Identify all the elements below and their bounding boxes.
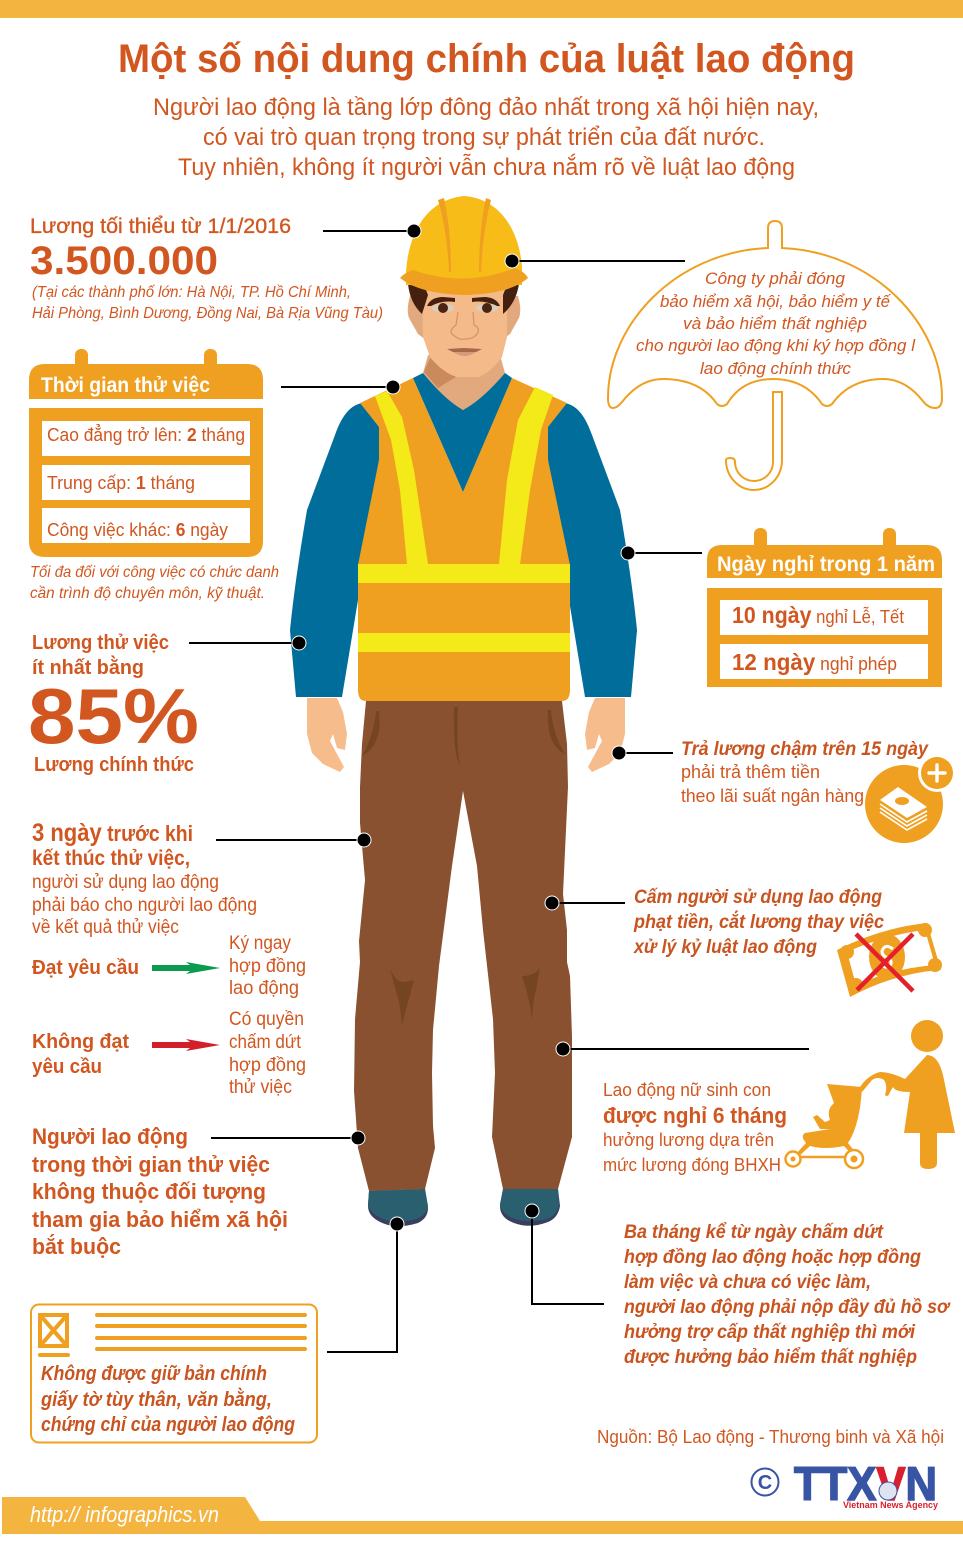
intro text xyxy=(153,94,819,181)
document lines xyxy=(95,1313,307,1351)
outcome: pass: Đạt yêu cầu xyxy=(32,957,139,979)
probation salary: Lương chính thức xyxy=(34,754,194,776)
notice before end of probation: người sử dụng lao động xyxy=(32,872,219,893)
icon: ID photo xyxy=(38,1315,70,1357)
neck shadow xyxy=(424,358,456,388)
outcome: pass: Ký ngay xyxy=(229,933,291,954)
document panel: chứng chỉ của người lao động xyxy=(41,1414,295,1436)
social insurance note: tham gia bảo hiểm xã hội xyxy=(32,1207,288,1232)
icon: crossed-out banknote xyxy=(837,923,942,997)
reflective stripes xyxy=(358,387,570,652)
calendar header xyxy=(707,545,942,578)
probation note: cần trình độ chuyên môn, kỹ thuật. xyxy=(30,585,265,602)
calendar body xyxy=(707,588,942,687)
late payment note: phải trả thêm tiền xyxy=(681,762,820,782)
right shoe xyxy=(500,1189,560,1226)
social insurance note: bắt buộc xyxy=(32,1234,121,1259)
late payment note: Trả lương chậm trên 15 ngày xyxy=(681,739,929,760)
probation calendar panel: Thời gian thử việc xyxy=(41,374,210,397)
hair xyxy=(408,284,519,314)
icon: money plus xyxy=(865,754,956,843)
logo: TTXVN: Vietnam News Agency xyxy=(843,1500,938,1510)
document panel: giấy tờ tùy thân, văn bằng, xyxy=(40,1388,272,1411)
umbrella text: và bảo hiểm thất nghiệp xyxy=(683,314,867,333)
outcome: fail xyxy=(32,1009,306,1098)
face xyxy=(422,288,507,377)
social insurance note: không thuộc đối tượng xyxy=(32,1179,266,1204)
late payment note xyxy=(681,739,929,806)
outcome: fail: Không đạt xyxy=(32,1031,129,1053)
top bar xyxy=(0,0,963,18)
unemployment insurance note: Ba tháng kể từ ngày chấm dứt xyxy=(624,1222,884,1243)
title: Một số nội dung chính của luật lao động xyxy=(118,37,855,81)
social insurance note: trong thời gian thử việc xyxy=(32,1152,270,1177)
calendar tabs xyxy=(754,528,896,552)
outcome: fail: thử việc xyxy=(229,1077,292,1098)
umbrella text: cho người lao động khi ký hợp đồng l xyxy=(636,336,916,355)
notice before end of probation: kết thúc thử việc, xyxy=(32,847,190,870)
days off rows: 10 ngày nghỉ Lễ, Tết xyxy=(732,602,904,628)
notice before end of probation: phải báo cho người lao động xyxy=(32,895,257,916)
footer band xyxy=(2,1497,963,1534)
umbrella text: Công ty phải đóng xyxy=(705,269,846,288)
fines ban note xyxy=(633,887,884,958)
umbrella text: lao động chính thức xyxy=(700,359,851,378)
fines ban note: phạt tiền, cắt lương thay việc xyxy=(633,911,884,933)
left hand xyxy=(307,698,347,772)
worker figure xyxy=(290,196,637,1226)
probation salary: Lương thử việc xyxy=(32,632,169,654)
source: Nguồn: Bộ Lao động - Thương binh và Xã hội xyxy=(597,1427,944,1447)
trouser folds xyxy=(362,707,565,1025)
days off rows: 12 ngày nghỉ phép xyxy=(732,649,897,675)
outcome: pass xyxy=(32,933,306,999)
maternity note: được nghỉ 6 tháng xyxy=(603,1103,787,1128)
calendar tabs xyxy=(75,349,217,373)
probation rows: Cao đẳng trở lên: 2 tháng xyxy=(47,424,245,445)
outcome: fail: yêu cầu xyxy=(32,1056,102,1078)
right hand xyxy=(585,698,625,772)
maternity note: hưởng lương dựa trên xyxy=(603,1130,774,1150)
right arm xyxy=(548,403,637,697)
social insurance note xyxy=(32,1124,288,1259)
outcome: pass: hợp đồng xyxy=(229,956,306,977)
probation salary xyxy=(28,632,199,776)
arrow: green xyxy=(152,962,220,974)
leader lines xyxy=(189,231,809,1352)
calendar header xyxy=(29,364,263,399)
unemployment insurance note: hợp đồng lao động hoặc hợp đồng xyxy=(624,1247,921,1268)
outcome: fail: hợp đồng xyxy=(229,1055,306,1076)
fines ban note: xử lý kỷ luật lao động xyxy=(633,937,817,958)
icon: umbrella handle xyxy=(726,392,782,490)
outcome: fail: Có quyền xyxy=(229,1009,304,1030)
vest xyxy=(358,378,570,701)
days off calendar panel: Ngày nghỉ trong 1 năm xyxy=(717,553,935,576)
icon: umbrella canopy xyxy=(608,221,942,408)
maternity note: Lao động nữ sinh con xyxy=(603,1080,771,1100)
maternity note xyxy=(603,1080,787,1175)
arrow: red xyxy=(152,1039,220,1051)
probation salary: ít nhất bằng xyxy=(32,655,144,679)
social insurance note: Người lao động xyxy=(32,1124,188,1149)
facial features xyxy=(427,297,500,356)
undershirt xyxy=(413,373,512,492)
probation salary: 85% xyxy=(28,672,199,760)
document panel xyxy=(31,1304,317,1442)
leader dots xyxy=(292,224,635,1231)
minimum wage block: Hải Phòng, Bình Dương, Đồng Nai, Bà Rịa Vũng Tàu) xyxy=(32,305,383,322)
umbrella panel xyxy=(608,221,942,490)
intro text: Tuy nhiên, không ít người vẫn chưa nắm rõ về luật lao động xyxy=(178,154,795,181)
calendar body xyxy=(29,408,263,557)
neck xyxy=(423,355,505,410)
outcome: fail: chấm dứt xyxy=(229,1032,302,1053)
trousers xyxy=(354,701,572,1191)
probation rows xyxy=(42,421,250,543)
probation rows: Công việc khác: 6 ngày xyxy=(47,520,228,540)
notice before end of probation: 3 ngày trước khi xyxy=(32,819,193,847)
minimum wage block: 3.500.000 xyxy=(30,239,218,283)
copyright mark: C xyxy=(758,1472,772,1494)
notice before end of probation: về kết quả thử việc xyxy=(32,917,179,938)
umbrella text xyxy=(636,269,916,378)
days off rows xyxy=(720,600,928,679)
late payment note: theo lãi suất ngân hàng xyxy=(681,786,864,806)
minimum wage block: Lương tối thiểu từ 1/1/2016 xyxy=(30,215,291,238)
left shoe xyxy=(368,1189,428,1226)
mother xyxy=(911,1020,943,1052)
hard hat xyxy=(400,196,528,295)
ears xyxy=(408,296,520,340)
maternity note: mức lương đóng BHXH xyxy=(603,1155,781,1175)
notice before end of probation xyxy=(32,819,257,938)
probation rows: Trung cấp: 1 tháng xyxy=(47,473,195,493)
logo: TTXVN: TTXVN xyxy=(794,1457,937,1510)
days off calendar panel xyxy=(707,528,942,687)
probation note xyxy=(30,564,279,602)
unemployment insurance note xyxy=(624,1222,951,1368)
website link: http:// infographics.vn xyxy=(30,1502,219,1527)
unemployment insurance note: làm việc và chưa có việc làm, xyxy=(624,1272,871,1293)
minimum wage block: (Tại các thành phố lớn: Hà Nội, TP. Hồ Chí Minh, xyxy=(32,284,351,301)
copyright mark xyxy=(752,1468,778,1496)
unemployment insurance note: người lao động phải nộp đầy đủ hồ sơ xyxy=(624,1297,951,1318)
stroller xyxy=(795,1084,862,1157)
fines ban note: Cấm người sử dụng lao động xyxy=(634,887,882,908)
intro text: có vai trò quan trọng trong sự phát triển của đất nước. xyxy=(203,124,765,151)
umbrella text: bảo hiểm xã hội, bảo hiểm y tế xyxy=(660,292,892,311)
document panel: Không được giữ bản chính xyxy=(41,1363,267,1385)
minimum wage block xyxy=(30,215,383,322)
icon: mother with stroller xyxy=(786,1020,955,1169)
unemployment insurance note: được hưởng bảo hiểm thất nghiệp xyxy=(624,1347,917,1368)
intro text: Người lao động là tầng lớp đông đảo nhất trong xã hội hiện nay, xyxy=(153,94,819,121)
unemployment insurance note: hưởng trợ cấp thất nghiệp thì mới xyxy=(624,1322,916,1343)
probation note: Tối đa đối với công việc có chức danh xyxy=(30,564,279,581)
outcome: pass: lao động xyxy=(229,978,299,999)
left arm xyxy=(290,403,379,697)
probation calendar panel xyxy=(29,349,263,557)
